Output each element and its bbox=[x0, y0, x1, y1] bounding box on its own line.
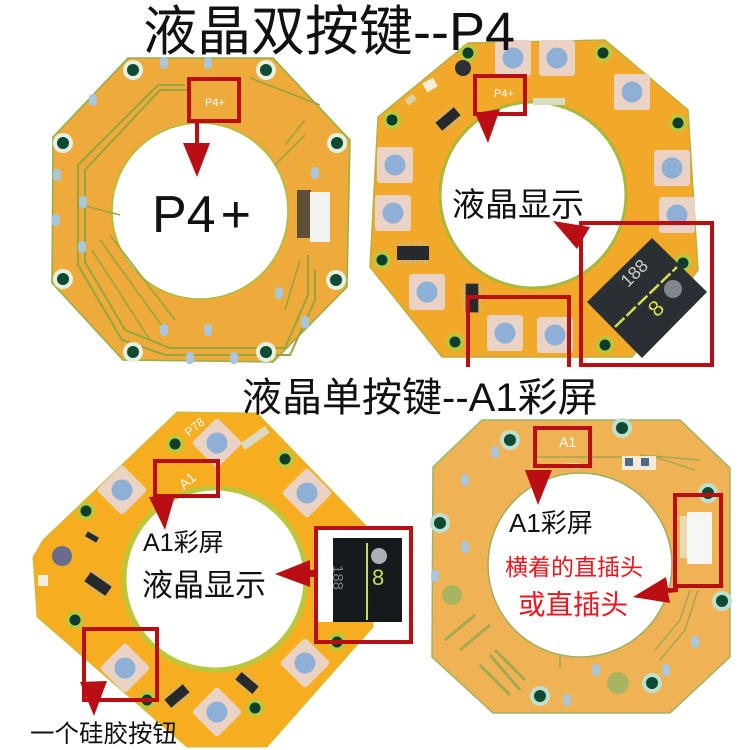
label: LCD display: 液晶显示 bbox=[142, 568, 266, 603]
label: horizontal direct plug: 横着的直插头 bbox=[505, 554, 643, 580]
title: dual-button P4: 液晶双按键--P4 bbox=[143, 2, 515, 62]
capacitor bbox=[455, 60, 471, 76]
board label: A1: A1 bbox=[176, 469, 199, 492]
arrow: down bbox=[475, 109, 500, 143]
board label: P78: P78 bbox=[182, 415, 208, 439]
LCD screen bbox=[329, 538, 402, 622]
red box around LCD bbox=[316, 528, 411, 642]
label: A1 color screen: A1彩屏 bbox=[143, 529, 224, 557]
heading: single-button A1: 液晶单按键--A1彩屏 bbox=[242, 376, 598, 420]
board label: P4+ bbox=[205, 97, 225, 109]
red highlight box bbox=[189, 79, 239, 121]
arrow: down bbox=[183, 121, 210, 177]
label: one silicone button: 一个硅胶按钮 bbox=[30, 720, 177, 748]
panel: bottom-right circuit board bbox=[430, 418, 732, 713]
board label: A1: A1 bbox=[559, 434, 576, 450]
red box around LCD bbox=[581, 223, 712, 365]
label: P4+: P4+ bbox=[152, 186, 251, 244]
arrow: down-left bbox=[80, 681, 107, 716]
board label: P78: P78 bbox=[566, 462, 581, 471]
capacitor bbox=[52, 546, 72, 566]
arrow: left to LCD bbox=[275, 560, 316, 587]
panel: bottom-left circuit board bbox=[30, 412, 411, 748]
board label: P4+ bbox=[494, 88, 514, 100]
LCD screen: 188 bbox=[617, 255, 652, 291]
LCD screen bbox=[587, 238, 707, 358]
arrow: down bbox=[525, 470, 552, 505]
connector bbox=[680, 512, 712, 564]
label: A1 color screen: A1彩屏 bbox=[509, 508, 593, 538]
red highlight box bbox=[475, 76, 525, 114]
panel: top-left circuit board bbox=[52, 57, 350, 364]
arrow: left to connector bbox=[633, 577, 678, 603]
connector bbox=[297, 190, 330, 242]
red box: A1 mark bbox=[155, 461, 218, 496]
arrow: down bbox=[149, 495, 175, 530]
red box: A1 mark bbox=[535, 428, 590, 466]
white patch behind LCD bbox=[318, 530, 376, 622]
panel: top-right circuit board bbox=[370, 40, 712, 367]
LCD screen: 188 bbox=[329, 565, 346, 590]
red box around connector bbox=[675, 495, 721, 586]
label: or direct plug: 或直插头 bbox=[518, 589, 628, 620]
LCD screen: 8 bbox=[372, 565, 384, 590]
arrow: left to LCD bbox=[553, 221, 590, 249]
red box around button bbox=[84, 629, 157, 700]
LCD screen: 8 bbox=[643, 295, 669, 322]
red box around buttons bbox=[468, 297, 569, 367]
label: LCD display: 液晶显示 bbox=[452, 186, 584, 223]
